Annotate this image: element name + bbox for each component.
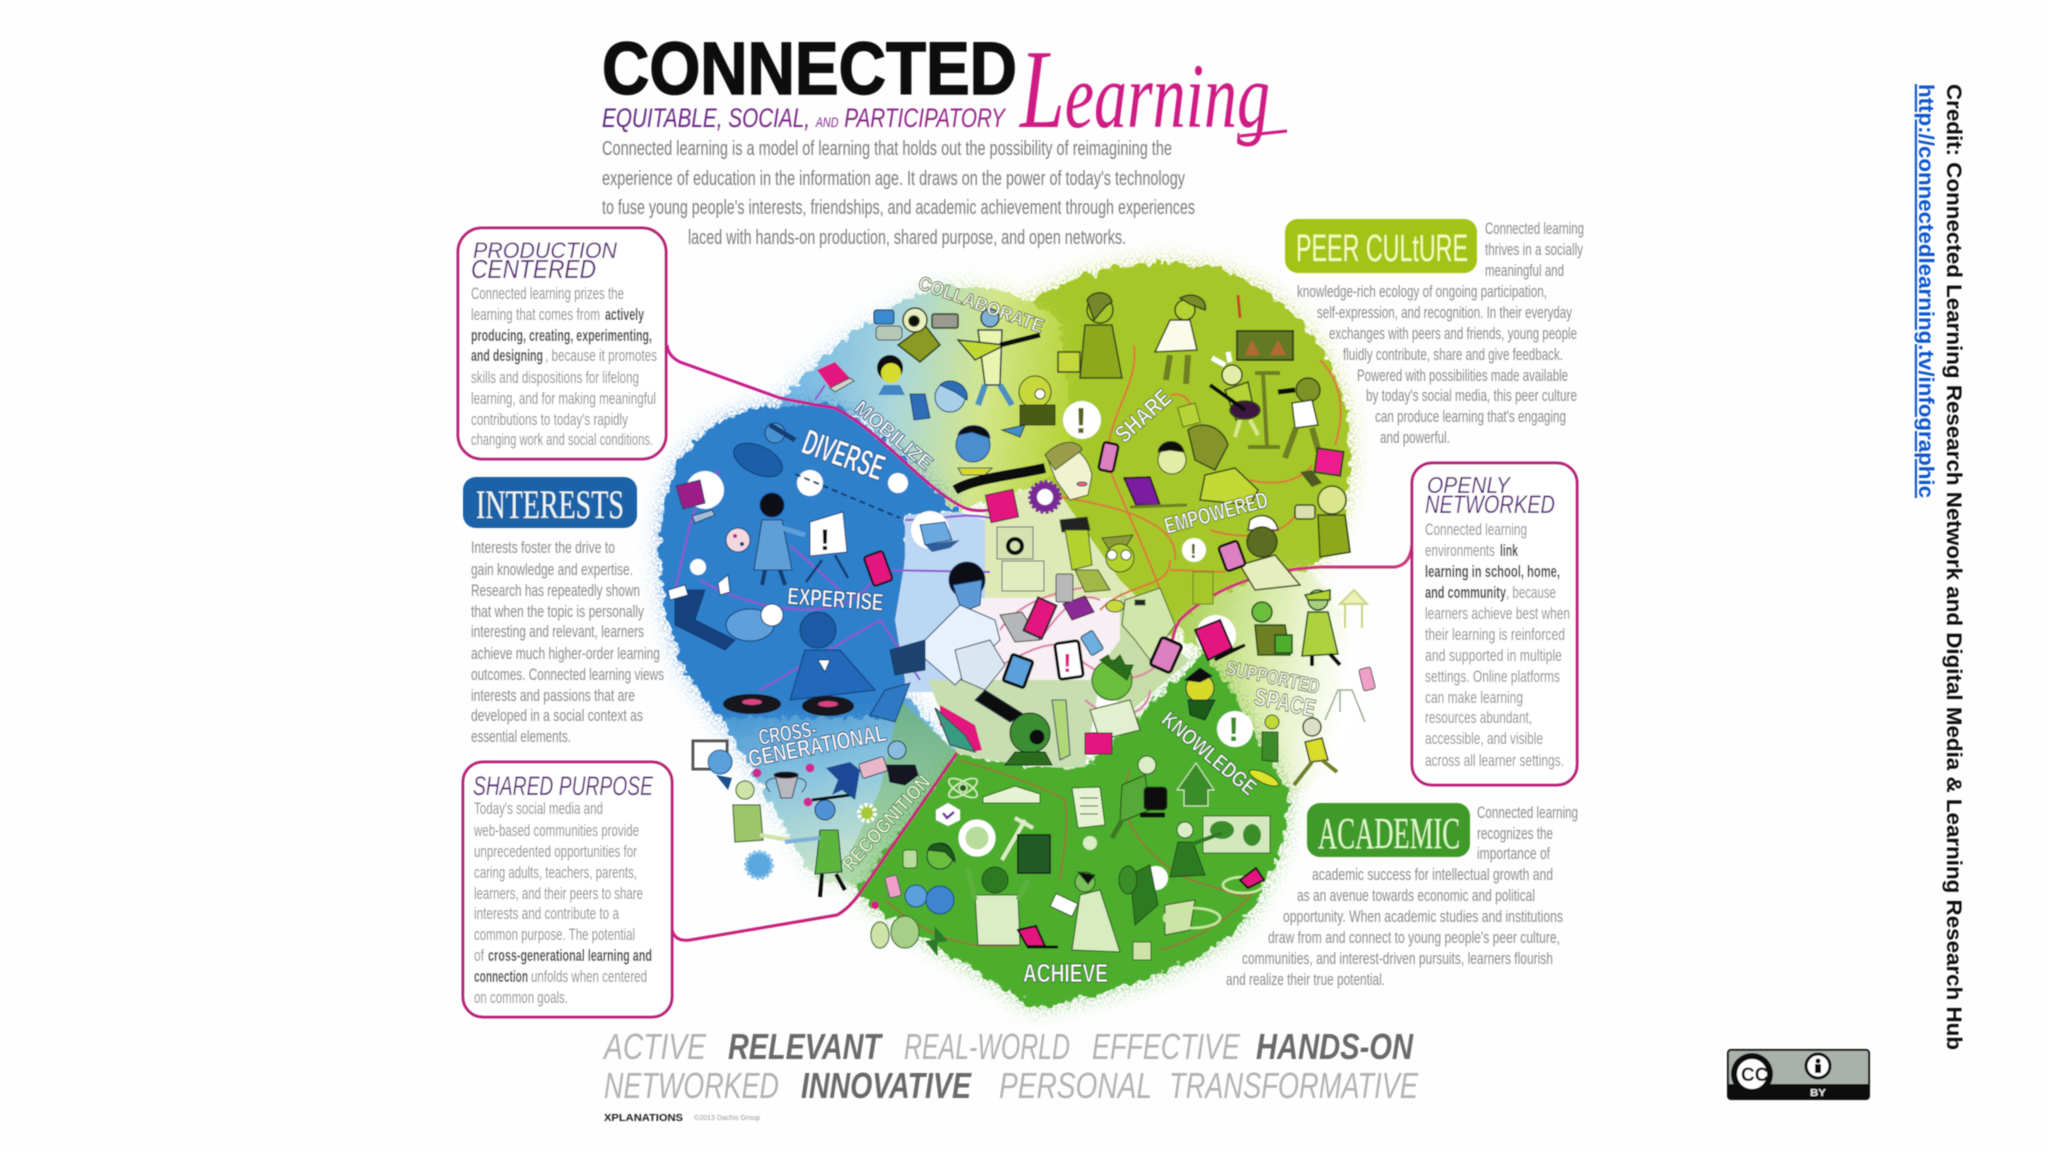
body: academic: recognizes the [1477, 824, 1553, 843]
page content [458, 27, 1966, 1124]
figure: painter [754, 493, 805, 585]
body: production centered: contributions to today's rapidly [471, 410, 628, 429]
badge: interests: INTERESTS [476, 482, 624, 527]
body: academic: communities, and interest-driven pursuits, learners flourish [1242, 949, 1553, 968]
icon: video camera [858, 756, 888, 779]
icon: pale gear [859, 805, 875, 821]
icon: blue phone [1080, 630, 1104, 656]
body: interests: outcomes. Connected learning views [471, 665, 664, 684]
icons: magenta stars [752, 764, 814, 806]
icon: pink phone [1150, 637, 1182, 673]
body: openly networked: link [1500, 541, 1518, 560]
icon: turntables [723, 694, 854, 716]
body: openly networked: their learning is reinforced [1425, 625, 1565, 644]
icon: grey laptop [1000, 612, 1040, 642]
body: production centered: learning, and for making meaningful [471, 389, 656, 408]
icon: chalkboard [1237, 331, 1293, 360]
body: production centered: Connected learning prizes the [471, 284, 624, 303]
icon: green star [928, 930, 945, 952]
icon: camera box [1056, 574, 1073, 602]
badge: peer culture: PEER CULtURE [1296, 228, 1468, 270]
recognition figures [693, 741, 935, 897]
panel: shared purpose [463, 762, 672, 1017]
label: cross: CROSS- [757, 716, 818, 750]
icon: easel canvas [806, 512, 848, 582]
icon: red note [1238, 295, 1240, 318]
figure: skater [729, 423, 795, 484]
icon: magenta tablet [1024, 597, 1056, 639]
figure: girl head [927, 843, 955, 869]
figure: teacher [1170, 822, 1222, 877]
license badge: BY [1810, 1088, 1826, 1099]
body: academic [1226, 803, 1578, 989]
body: shared purpose: unfolds when centered [531, 967, 647, 986]
source link rotated: http://connectedlearning.tv/infographic [1914, 84, 1938, 498]
body: production centered: actively [605, 305, 644, 324]
collaborate figures [817, 273, 1055, 475]
body: production centered [471, 284, 657, 449]
title: Connected: CONNECTED [602, 27, 1017, 110]
supported space figures [1157, 590, 1375, 800]
body: interests: achieve much higher-order learning [471, 644, 660, 663]
label: knowledge: KNOWLEDGE [1157, 707, 1262, 800]
icon: black bar [955, 468, 1045, 490]
icon: book [1133, 942, 1151, 960]
body: production centered: and designing [471, 346, 543, 365]
zone: center pale blue [895, 512, 992, 692]
label: collaborate: COLLABORATE [915, 273, 1047, 338]
figure: black hair person [1158, 442, 1186, 474]
label: generational: GENERATIONAL [746, 720, 889, 773]
zone: supported space [1175, 572, 1358, 792]
lines: academic zone brown [885, 760, 1255, 950]
body: openly networked: across all learner settings. [1425, 751, 1564, 770]
badge: peer culture [1285, 219, 1477, 273]
icon: white alert small: ! [1190, 541, 1197, 563]
center figures [935, 442, 1245, 765]
label: supported: SUPPORTED [1224, 657, 1321, 699]
keyword list: EFFECTIVE [1092, 1026, 1241, 1067]
icon: magenta phone [863, 550, 893, 586]
figure: two blue heads [905, 885, 954, 914]
icon: wedge shoe [983, 786, 1040, 803]
figure: man with laptop [890, 562, 1000, 685]
body: interests: essential elements. [471, 727, 571, 746]
icon: pink phone [885, 875, 901, 898]
body: production centered: , because it promotes [545, 346, 657, 365]
badge: interests [463, 477, 637, 528]
icon: purple laptop [1124, 477, 1187, 507]
icon: burst and laptop [911, 511, 960, 552]
figure: camera operator [898, 308, 958, 362]
icons: white clouds [690, 470, 908, 575]
lines: center pink [960, 585, 1170, 715]
body: shared purpose: of [474, 946, 484, 965]
publisher credit [604, 1113, 760, 1124]
body: shared purpose: caring adults, teachers, parents, [474, 863, 637, 882]
body: shared purpose [473, 799, 652, 1007]
icon: pink laptop [1018, 926, 1058, 947]
body: openly networked: learning in school, home, [1425, 562, 1560, 581]
body: peer culture: exchanges with peers and friends, young people [1329, 324, 1577, 343]
icon: alert phone [1055, 641, 1083, 679]
figure: glasses guy [1102, 535, 1134, 572]
figure: old man [733, 781, 800, 842]
figure: woman face [1045, 442, 1092, 500]
body: openly networked: resources abundant, [1425, 708, 1532, 727]
icon: mixer [1002, 561, 1044, 591]
body: shared purpose: on common goals. [474, 988, 568, 1007]
icon: magenta star [871, 901, 879, 909]
panel: production centered [458, 228, 666, 459]
icon: playhouse [1340, 590, 1367, 628]
figure: man in suit [968, 867, 1028, 945]
body: shared purpose: web-based communities provide [473, 821, 639, 840]
intro paragraph: to fuse young people's interests, friendships, and academic achievement through experiences [602, 197, 1195, 219]
intro paragraph [602, 138, 1195, 249]
intro paragraph: laced with hands-on production, shared purpose, and open networks. [688, 227, 1126, 249]
icon: pink square [985, 489, 1019, 523]
body: openly networked: can make learning [1425, 688, 1523, 707]
zone backgrounds [661, 263, 1358, 1008]
icon: magenta tablet small [1085, 733, 1112, 754]
body: peer culture: Connected learning [1485, 219, 1584, 238]
label: mobilize: MOBILIZE [850, 397, 937, 475]
body: peer culture: and powerful. [1380, 428, 1450, 447]
icon: blue laptop [910, 394, 930, 420]
body: academic: importance of [1477, 844, 1550, 863]
icon: purple laptop [1063, 596, 1094, 620]
icon: blue tablet [1003, 654, 1033, 688]
label: achieve: ACHIEVE [1023, 958, 1108, 988]
zone: peer culture lobe [1000, 263, 1350, 640]
body: interests: developed in a social context as [471, 706, 643, 725]
body: academic: academic success for intellectual growth and [1312, 865, 1553, 884]
body: peer culture: can produce learning that's engaging [1375, 407, 1566, 426]
body: academic: draw from and connect to young people's peer culture, [1268, 928, 1560, 947]
figure: woman at laptop [1188, 425, 1258, 505]
keyword list: PERSONAL [999, 1065, 1152, 1106]
heading: openly networked [1425, 472, 1555, 519]
icon: big alert bubble [1063, 400, 1101, 441]
label: recognition: RECOGNITION [838, 771, 935, 875]
keyword list: RELEVANT [728, 1026, 883, 1067]
body: peer culture: by today's social media, this peer culture [1366, 386, 1577, 405]
figure: seated student [1119, 865, 1195, 935]
interests figures [668, 397, 1000, 773]
keyword list: TRANSFORMATIVE [1169, 1065, 1419, 1106]
icon: trophy [766, 772, 806, 798]
figure: braids person [1060, 517, 1110, 592]
body: openly networked: learners achieve best when [1425, 604, 1570, 623]
body: openly networked: environments [1425, 541, 1495, 560]
body: interests: interesting and relevant, learners [471, 622, 644, 641]
zone: center white [960, 598, 1125, 680]
body: shared purpose: connection [474, 967, 528, 986]
icon: table [1164, 908, 1220, 928]
icon: thumbs up [903, 850, 917, 868]
icon: lightbulb gear [1030, 482, 1060, 512]
keyword list: REAL-WORLD [904, 1026, 1070, 1067]
body: peer culture: meaningful and [1485, 261, 1564, 280]
icon: pink phone [1098, 442, 1119, 472]
icon: speaker [997, 527, 1033, 559]
figure: dreadlock head [877, 355, 905, 395]
zone: academic lobe [857, 655, 1288, 1008]
connector: shared purpose [672, 753, 957, 940]
central illustration [661, 263, 1412, 1008]
keyword list: INNOVATIVE [801, 1065, 972, 1106]
body: interests: gain knowledge and expertise. [471, 560, 633, 579]
body: peer culture: Powered with possibilities made available [1357, 366, 1568, 385]
icon: small chalkboard [1018, 835, 1050, 873]
zone: collaborate lobe [775, 284, 1075, 510]
figure: feather head [1185, 668, 1215, 720]
figure: lab coat man [1050, 872, 1120, 952]
connector: production centered [667, 345, 990, 511]
keyword list: ACTIVE [602, 1026, 707, 1067]
badge: academic [1307, 803, 1470, 858]
body: production centered: learning that comes from [471, 305, 600, 324]
icon: white sun [962, 823, 992, 853]
lines: blue zone purple [675, 385, 1000, 690]
icon: white alert bubble: ! [1228, 711, 1239, 749]
dashed line [795, 474, 900, 518]
body: openly networked: and community [1425, 583, 1506, 602]
icon: swing set [1325, 690, 1365, 722]
body: interests: Research has repeatedly shown [471, 581, 640, 600]
figure: pale big face [1122, 588, 1175, 660]
label: expertise: EXPERTISE [787, 583, 884, 617]
body: peer culture: thrives in a socially [1485, 240, 1583, 259]
icon: alert phone: ! [1063, 648, 1072, 678]
zone: center pale yellow [985, 480, 1140, 600]
zone: interests dark blue [661, 402, 960, 722]
icon: purple computer [676, 480, 715, 523]
heading: shared purpose: SHARED PURPOSE [473, 771, 654, 801]
body: openly networked: , because [1506, 583, 1556, 602]
intro paragraph: experience of education in the information age. It draws on the power of today's technology [602, 168, 1185, 190]
label: empowered: EMPOWERED [1162, 486, 1271, 539]
heading: openly networked: NETWORKED [1425, 491, 1555, 519]
intro paragraph: Connected learning is a model of learning that holds out the possibility of reimagining the [602, 138, 1172, 160]
icon: big alert bubble: ! [1075, 400, 1087, 441]
zone: recognition gradient [722, 695, 957, 888]
icon: world map [1203, 816, 1270, 853]
icon: paint palette [726, 528, 750, 552]
icon: small bag [1178, 403, 1200, 427]
body: interests: that when the topic is personally [471, 602, 644, 621]
body: openly networked: Connected learning [1425, 520, 1527, 539]
icon: idea bubble [1083, 836, 1097, 850]
body: academic: and realize their true potential. [1226, 970, 1385, 989]
keyword list: HANDS-ON [1256, 1026, 1414, 1067]
figure: runner [1294, 718, 1337, 785]
icon: document [1072, 787, 1105, 828]
figure: lying girl [668, 575, 783, 650]
icon: pink laptop [817, 362, 854, 392]
body: shared purpose: interests and contribute to a [474, 904, 619, 923]
icon: dark blue flash [826, 762, 860, 800]
publisher credit: ©2013 Dachis Group [694, 1114, 760, 1122]
icon: hammer [1002, 818, 1033, 860]
zone: center pale right [1090, 590, 1190, 712]
heading: openly networked: OPENLY [1427, 472, 1512, 498]
icon: easel canvas: ! [820, 524, 830, 557]
figure: guitar player [958, 309, 1040, 405]
icon: check bubble [936, 803, 960, 826]
figure: videographer [887, 741, 918, 785]
icon: blue laptop on deck [870, 683, 910, 722]
icon: blue cap on boombox [874, 310, 902, 340]
body: peer culture: self-expression, and recognition. In their everyday [1317, 303, 1572, 322]
body: production centered: skills and dispositions for lifelong [471, 368, 639, 387]
figure: singer [1278, 378, 1320, 458]
body: production centered: producing, creating, experimenting, [471, 326, 652, 345]
figure: pale blue woman [955, 640, 1025, 722]
body: academic: as an avenue towards economic and political [1297, 886, 1535, 905]
body: interests: interests and passions that are [471, 686, 635, 705]
figure: skateboarder [1247, 715, 1281, 789]
zone: recognition teal band [838, 700, 957, 888]
body: peer culture [1297, 219, 1584, 447]
body: openly networked: settings. Online platforms [1425, 667, 1560, 686]
figure: person with green bag [1252, 602, 1292, 655]
figure: girl in white dress [1155, 295, 1205, 384]
icon: frame and rosette [693, 741, 732, 790]
figure: raised hand [1052, 700, 1070, 760]
title: Learning script: Learning [1019, 28, 1270, 152]
figure: spiky green kid [1090, 655, 1140, 740]
figure: capped guy [1218, 516, 1300, 590]
publisher credit: XPLANATIONS [604, 1113, 683, 1124]
body: openly networked [1425, 520, 1570, 770]
icon: burst [686, 471, 724, 509]
source credit rotated: Credit: Connected Learning Research Network and Digital Media & Learning Research Hub [1942, 84, 1966, 1050]
body: peer culture: knowledge-rich ecology of ongoing participation, [1297, 282, 1547, 301]
academic figures [871, 756, 1270, 988]
heading: production centered: PRODUCTION [473, 238, 617, 263]
license badge: CC [1741, 1065, 1769, 1086]
figure: bunny guitarist [1210, 352, 1260, 437]
body: academic: opportunity. When academic studies and institutions [1283, 907, 1563, 926]
panel: openly networked [1412, 463, 1577, 785]
keyword list [602, 1026, 1419, 1106]
figure: student on chair [1112, 756, 1167, 838]
network lines [675, 345, 1341, 950]
body: interests: Interests foster the drive to [471, 538, 615, 557]
label: share: SHARE [1110, 384, 1177, 448]
body: openly networked: and supported in multiple [1425, 646, 1562, 665]
figure: woman in green dress [785, 795, 850, 897]
figure: blue boy [956, 426, 992, 475]
icon: atom [946, 775, 980, 801]
subtitle: EQUITABLE, SOCIAL, AND PARTICIPATORY [602, 103, 1007, 133]
zone: center pale lower [928, 680, 1100, 768]
body: openly networked: accessible, and visible [1425, 729, 1543, 748]
body: shared purpose: unprecedented opportunities for [474, 842, 637, 861]
heading: production centered: CENTERED [471, 254, 596, 284]
figure: headphones person [1005, 713, 1052, 765]
figure: woman in green coat [1302, 590, 1340, 666]
icon: blue gear [746, 852, 772, 878]
figure: glasses man [1002, 376, 1055, 437]
icon: desk with laptop [1223, 868, 1264, 893]
icon: pink crown book [935, 705, 982, 752]
icon: magenta laptop burst [1195, 615, 1245, 660]
label: space: SPACE [1252, 683, 1318, 723]
icon: pink monitor [1300, 448, 1344, 487]
label: diverse: DIVERSE [797, 421, 890, 488]
heading: production centered [471, 238, 617, 284]
connector: openly networked [1172, 545, 1412, 660]
figure: blue head [935, 381, 967, 412]
keyword list: NETWORKED [604, 1065, 779, 1106]
peer culture figures [1058, 293, 1350, 604]
icon: white alert small [1182, 538, 1206, 563]
badge: academic: ACADEMIC [1318, 809, 1460, 858]
icon: mic stand [1248, 373, 1280, 447]
figure: robed person [1058, 293, 1122, 378]
icon: white alert bubble [1217, 711, 1253, 749]
body: shared purpose: cross-generational learning and [488, 946, 652, 965]
icon: yellow hand [1106, 600, 1124, 612]
body: interests [471, 538, 664, 746]
figure: DJ [790, 612, 875, 700]
figures: clapping heads [871, 916, 919, 948]
license badge [1728, 1050, 1869, 1099]
body: peer culture: fluidly contribute, share and give feedback. [1343, 345, 1563, 364]
lines: peer zone orange [1060, 345, 1341, 610]
figure: talking bald guy [1295, 486, 1350, 557]
body: shared purpose: Today's social media and [474, 799, 603, 818]
body: shared purpose: common purpose. The potential [474, 925, 635, 944]
icon: pink phone small [1359, 667, 1375, 691]
body: academic: Connected learning [1477, 803, 1578, 822]
icon: white burst [1144, 866, 1168, 890]
icon: school house [1177, 763, 1214, 806]
body: shared purpose: learners, and their peers to share [474, 884, 643, 903]
icon: paper bag [1193, 572, 1213, 604]
body: production centered: changing work and social conditions. [471, 430, 653, 449]
